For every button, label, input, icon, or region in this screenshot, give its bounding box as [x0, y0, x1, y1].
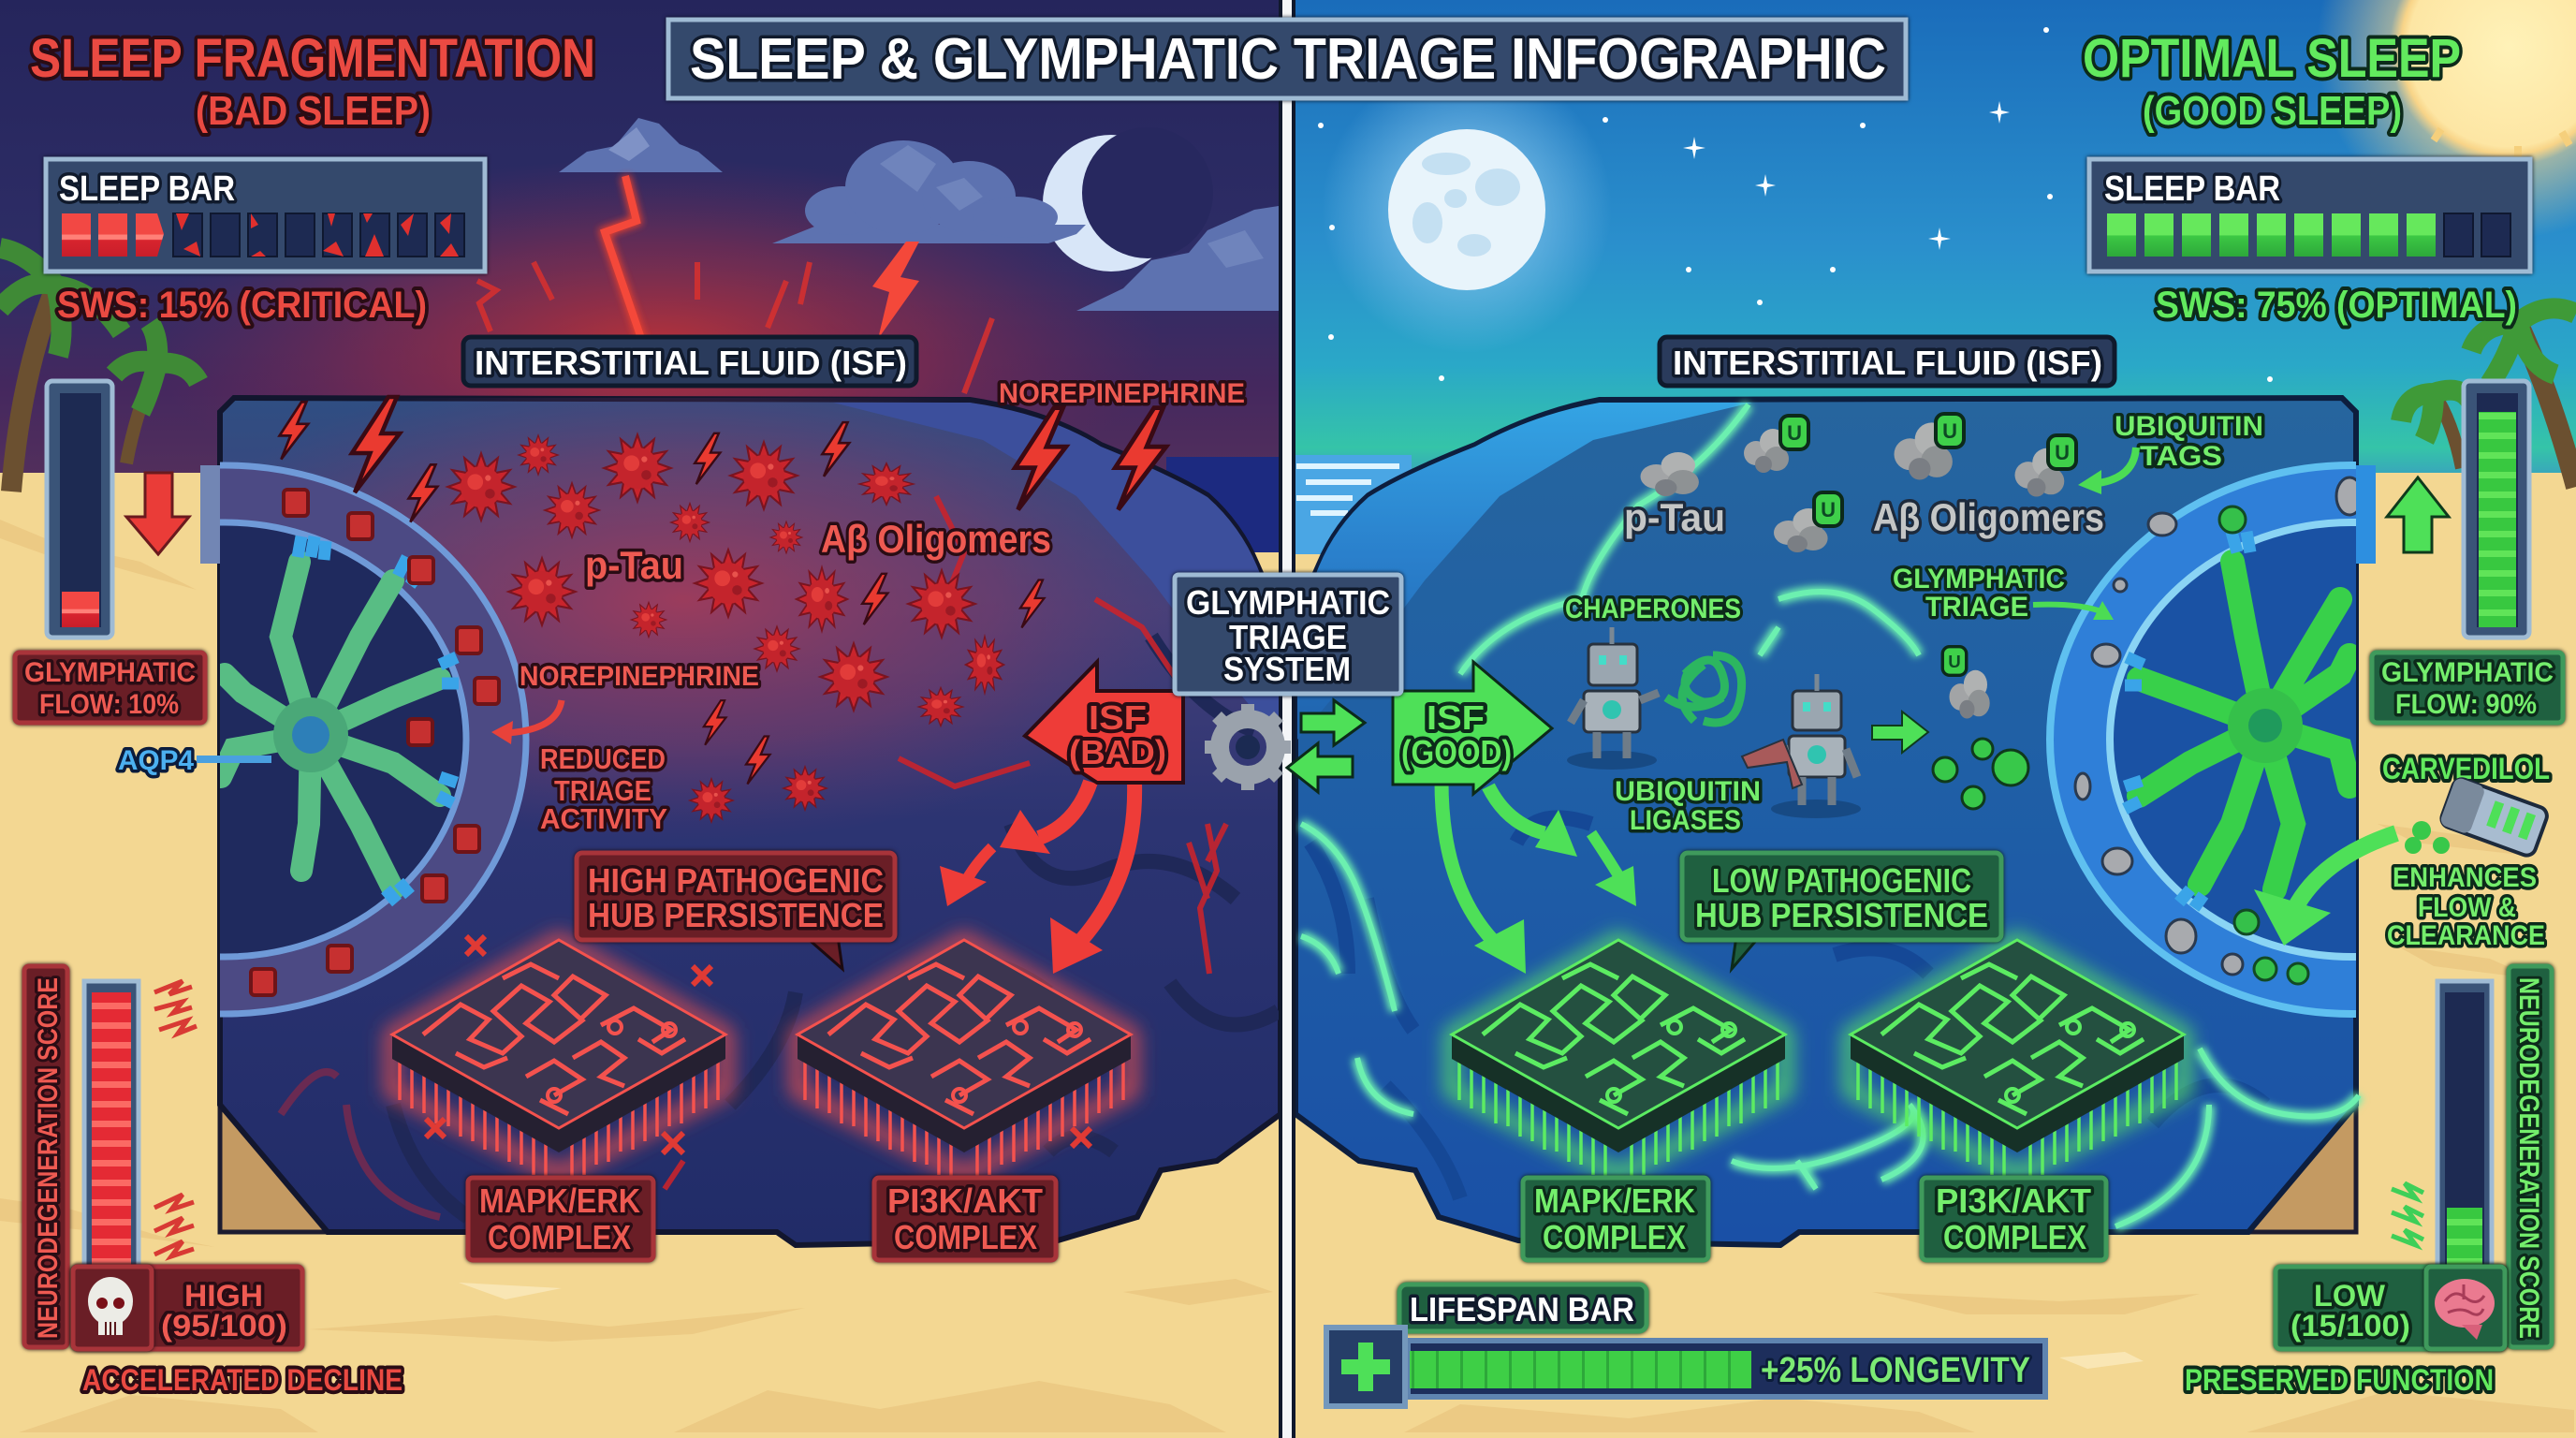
palm trees left: [0, 248, 198, 492]
cloud left small: [559, 118, 723, 172]
ISF bad arrow: (BAD): [1069, 733, 1166, 771]
PI3K/AKT complex label left: COMPLEX: [894, 1218, 1037, 1256]
amyloid beta oligomers label good: Aβ Oligomers: [1873, 495, 2104, 539]
sleep bar segments right: [2107, 213, 2510, 257]
glymphatic triage system box: [1175, 575, 1401, 694]
panel: bad sleep brain: [159, 356, 1281, 1245]
sleep bar left: SLEEP BAR: [59, 169, 235, 209]
degrading protein fragments: [1933, 647, 2028, 809]
left heading: sleep fragmentation: (BAD SLEEP): [196, 88, 431, 134]
ubiquitin ligases label: UBIQUITIN: [1615, 776, 1761, 807]
MAPK/ERK complex label left: COMPLEX: [488, 1218, 631, 1256]
p-Tau label: p-Tau: [585, 543, 683, 587]
MAPK/ERK complex label right: COMPLEX: [1543, 1218, 1686, 1256]
icon: brain: [2435, 1279, 2495, 1340]
mint glowing veins: [1301, 404, 2359, 1226]
SWS 15 percent critical: SWS: 15% (CRITICAL): [57, 285, 427, 326]
enhances flow and clearance label: [2387, 862, 2545, 951]
dark brain folds right: [1310, 817, 2265, 1198]
ubiquitin tags label and arrow: TAGS: [2140, 441, 2222, 472]
sand: [0, 473, 2576, 1438]
high score box with skull: HIGH: [184, 1279, 263, 1313]
astrocyte cell right: [2125, 532, 2349, 908]
neurodegeneration label right: NEURODEGENERATION SCORE: [2513, 977, 2544, 1339]
left sky background: [0, 0, 1288, 487]
PI3K/AKT complex label right: [1922, 1178, 2106, 1260]
icon: skull: [88, 1277, 133, 1335]
enhances flow and clearance label: ENHANCES: [2393, 862, 2537, 893]
lifespan bar label: LIFESPAN BAR: [1410, 1290, 1634, 1328]
high score box with skull: [73, 1267, 302, 1349]
red X marks: [426, 936, 1090, 1153]
robot: ubiquitin ligase: [1742, 674, 1861, 818]
vessel inlet left: [200, 465, 220, 564]
stars on the right sky: [1318, 27, 2273, 382]
robot: chaperone: [1567, 627, 1659, 770]
norepinephrine bolts: [1015, 408, 1166, 509]
glymphatic flow 10 percent box: FLOW: 10%: [39, 689, 179, 720]
SWS 75 percent optimal: SWS: 75% (OPTIMAL): [2156, 285, 2517, 326]
accelerated decline label: ACCELERATED DECLINE: [82, 1363, 402, 1397]
left sea: [1166, 457, 1288, 552]
neurodegeneration gauge right: [2437, 981, 2492, 1273]
enhances flow and clearance label: FLOW &: [2418, 892, 2516, 923]
brain outer lobe: [833, 403, 1279, 740]
MAPK/ERK complex label left: MAPK/ERK: [479, 1181, 640, 1220]
reduced triage activity label: TRIAGE: [554, 774, 651, 807]
enhances flow and clearance label: CLEARANCE: [2387, 920, 2545, 951]
cloud left right edge: [1076, 206, 1279, 311]
center divider: [1279, 0, 1295, 1438]
grey misfolded proteins with ubiquitin tags: [1640, 414, 2076, 552]
ubiquitin tags label and arrow: [2078, 411, 2263, 494]
red chip: PI3K/AKT: [798, 940, 1131, 1176]
left heading: sleep fragmentation: [30, 28, 595, 134]
reduced triage activity label: REDUCED: [540, 742, 666, 775]
interstitial red haze: [311, 398, 1134, 816]
low score box with brain: LOW: [2314, 1279, 2386, 1313]
low score box with brain: [2276, 1267, 2505, 1349]
right heading: optimal sleep: (GOOD SLEEP): [2143, 88, 2402, 134]
left heading: sleep fragmentation: SLEEP FRAGMENTATION: [30, 28, 595, 89]
high pathogenic hub persistence callout: HIGH PATHOGENIC: [588, 861, 884, 900]
glymphatic flow 90 percent box: [2372, 653, 2563, 723]
panel: good sleep brain: [1295, 398, 2359, 1245]
ISF good arrow: ISF: [1427, 698, 1485, 737]
glymphatic flow 10 percent box: [15, 653, 205, 723]
arrows from ISF bad to chips: [940, 782, 1134, 974]
glymphatic flow gauge right: [2464, 381, 2529, 638]
ISF bad arrow: [1025, 662, 1183, 783]
lightning strike from small cloud: [605, 176, 644, 346]
reduced triage activity label: [540, 742, 667, 835]
ubiquitin tags label and arrow: UBIQUITIN: [2115, 411, 2263, 442]
reduced triage activity label: ACTIVITY: [540, 802, 667, 835]
neurodegeneration label left: [24, 966, 67, 1347]
low pathogenic hub persistence callout: [1682, 853, 2001, 969]
vessel outlet right: [2356, 465, 2376, 564]
green zigzags: [2392, 1183, 2423, 1245]
green chip: MAPK/ERK: [1452, 940, 1785, 1176]
AQP4 label: AQP4: [118, 745, 194, 776]
arrow: flow down: [126, 473, 189, 554]
glymphatic triage label and arrow: GLYMPHATIC: [1893, 564, 2065, 594]
neurodegeneration label left: NEURODEGENERATION SCORE: [33, 977, 64, 1339]
low pathogenic hub persistence callout: LOW PATHOGENIC: [1712, 861, 1971, 900]
PI3K/AKT complex label left: [874, 1178, 1056, 1260]
dark brain folds: [393, 637, 1279, 1217]
sleep bar right: SLEEP BAR: [2104, 169, 2280, 209]
right heading: optimal sleep: OPTIMAL SLEEP: [2083, 28, 2461, 89]
chaperones label: CHAPERONES: [1565, 594, 1741, 624]
MAPK/ERK complex label right: MAPK/ERK: [1534, 1181, 1695, 1220]
sleep bar segments left: [62, 213, 464, 257]
vessel and astrocyte left: [220, 462, 530, 1017]
pathogens: p-Tau and A-beta oligomers: [280, 397, 1045, 822]
glymphatic triage label and arrow: TRIAGE: [1925, 592, 2028, 623]
red warning zigzags: [154, 981, 197, 1256]
neurodegeneration label right: [2509, 966, 2552, 1347]
low score box with brain: (15/100): [2291, 1309, 2410, 1343]
arrows from ISF good to chips: [1442, 782, 1636, 974]
right sea: [1288, 455, 1412, 554]
title banner: SLEEP & GLYMPHATIC TRIAGE INFOGRAPHIC: [690, 27, 1886, 92]
icon: gear: [1205, 704, 1291, 790]
carvedilol label: CARVEDILOL: [2382, 752, 2550, 785]
icon: carvedilol capsule: [2439, 776, 2550, 858]
ubiquitin ligases label: LIGASES: [1630, 805, 1741, 836]
astrocyte cell left: [221, 536, 459, 902]
norepinephrine label lower: NOREPINEPHRINE: [520, 661, 759, 692]
red storm glow: [150, 159, 1161, 534]
vessel and astrocyte right: [2046, 462, 2356, 1018]
ISF good arrow: (GOOD): [1401, 733, 1512, 771]
brain outer lobe right: [1297, 403, 1752, 740]
MAPK/ERK complex label left: [468, 1178, 653, 1260]
storm sparks: [477, 262, 992, 477]
curved red arrow: [491, 700, 562, 744]
debris cleared through vessel: [2075, 477, 2363, 975]
right sky background: [1288, 0, 2576, 487]
right heading: optimal sleep: [2083, 28, 2461, 134]
crescent moon: [1043, 127, 1213, 271]
glymphatic flow 90 percent box: FLOW: 90%: [2395, 689, 2537, 720]
high score box with skull: (95/100): [161, 1309, 287, 1343]
arrow: carvedilol to vessel: [2254, 821, 2450, 946]
arrow: to degradation: [1872, 712, 1928, 753]
arrow: flow left: [1287, 743, 1353, 792]
MAPK/ERK complex label right: [1523, 1178, 1708, 1260]
amyloid blocks stuck in vessel: [251, 490, 499, 995]
neurodegeneration gauge left: [84, 981, 139, 1273]
red cracks: [665, 496, 1226, 1189]
norepinephrine label top: NOREPINEPHRINE: [999, 378, 1245, 409]
lifespan bar: +25% LONGEVITY: [1761, 1351, 2030, 1390]
icon: sun: [2317, 0, 2576, 239]
sleep bar left: [46, 159, 485, 271]
red chip: MAPK/ERK: [392, 940, 725, 1176]
palm trees right: [2401, 308, 2576, 487]
arrow: flow up: [2387, 477, 2449, 552]
ISF bad arrow: ISF: [1089, 698, 1147, 737]
ubiquitin ligases label: [1615, 776, 1761, 836]
glymphatic flow 90 percent box: GLYMPHATIC: [2381, 657, 2554, 688]
cloud left large: [772, 140, 1086, 243]
p-Tau label good: p-Tau: [1624, 495, 1725, 539]
PI3K/AKT complex label right: PI3K/AKT: [1936, 1181, 2091, 1220]
knot: misfolded protein in chaperone grip: [1666, 655, 1742, 723]
high pathogenic hub persistence callout: HUB PERSISTENCE: [588, 896, 884, 934]
ISF good arrow: [1393, 662, 1552, 794]
glymphatic triage system box: GLYMPHATIC: [1186, 583, 1390, 622]
arrow: flow right: [1301, 700, 1365, 745]
icon: full moon: [1322, 63, 1612, 353]
lifespan bar: [1326, 1328, 2045, 1406]
interstitial fluid label left: INTERSTITIAL FLUID (ISF): [475, 344, 907, 382]
green chip: PI3K/AKT: [1851, 940, 2184, 1176]
glymphatic triage system box: TRIAGE: [1229, 618, 1347, 656]
glymphatic flow 10 percent box: GLYMPHATIC: [24, 657, 196, 688]
interstitial fluid label right: INTERSTITIAL FLUID (ISF): [1673, 344, 2102, 382]
PI3K/AKT complex label right: COMPLEX: [1943, 1218, 2086, 1256]
glymphatic triage label and arrow: [1893, 564, 2114, 623]
icon: plus badge: [1326, 1328, 1405, 1406]
glymphatic triage system box: SYSTEM: [1223, 650, 1351, 688]
sleep bar right: [2089, 159, 2530, 271]
lightning bolt from large cloud: [872, 242, 919, 339]
PI3K/AKT complex label left: PI3K/AKT: [887, 1181, 1043, 1220]
low pathogenic hub persistence callout: HUB PERSISTENCE: [1695, 896, 1988, 934]
amyloid beta oligomers label: Aβ Oligomers: [821, 517, 1051, 561]
glymphatic flow gauge left: [47, 381, 112, 638]
preserved function label: PRESERVED FUNCTION: [2185, 1363, 2494, 1397]
high pathogenic hub persistence callout: [577, 853, 895, 969]
